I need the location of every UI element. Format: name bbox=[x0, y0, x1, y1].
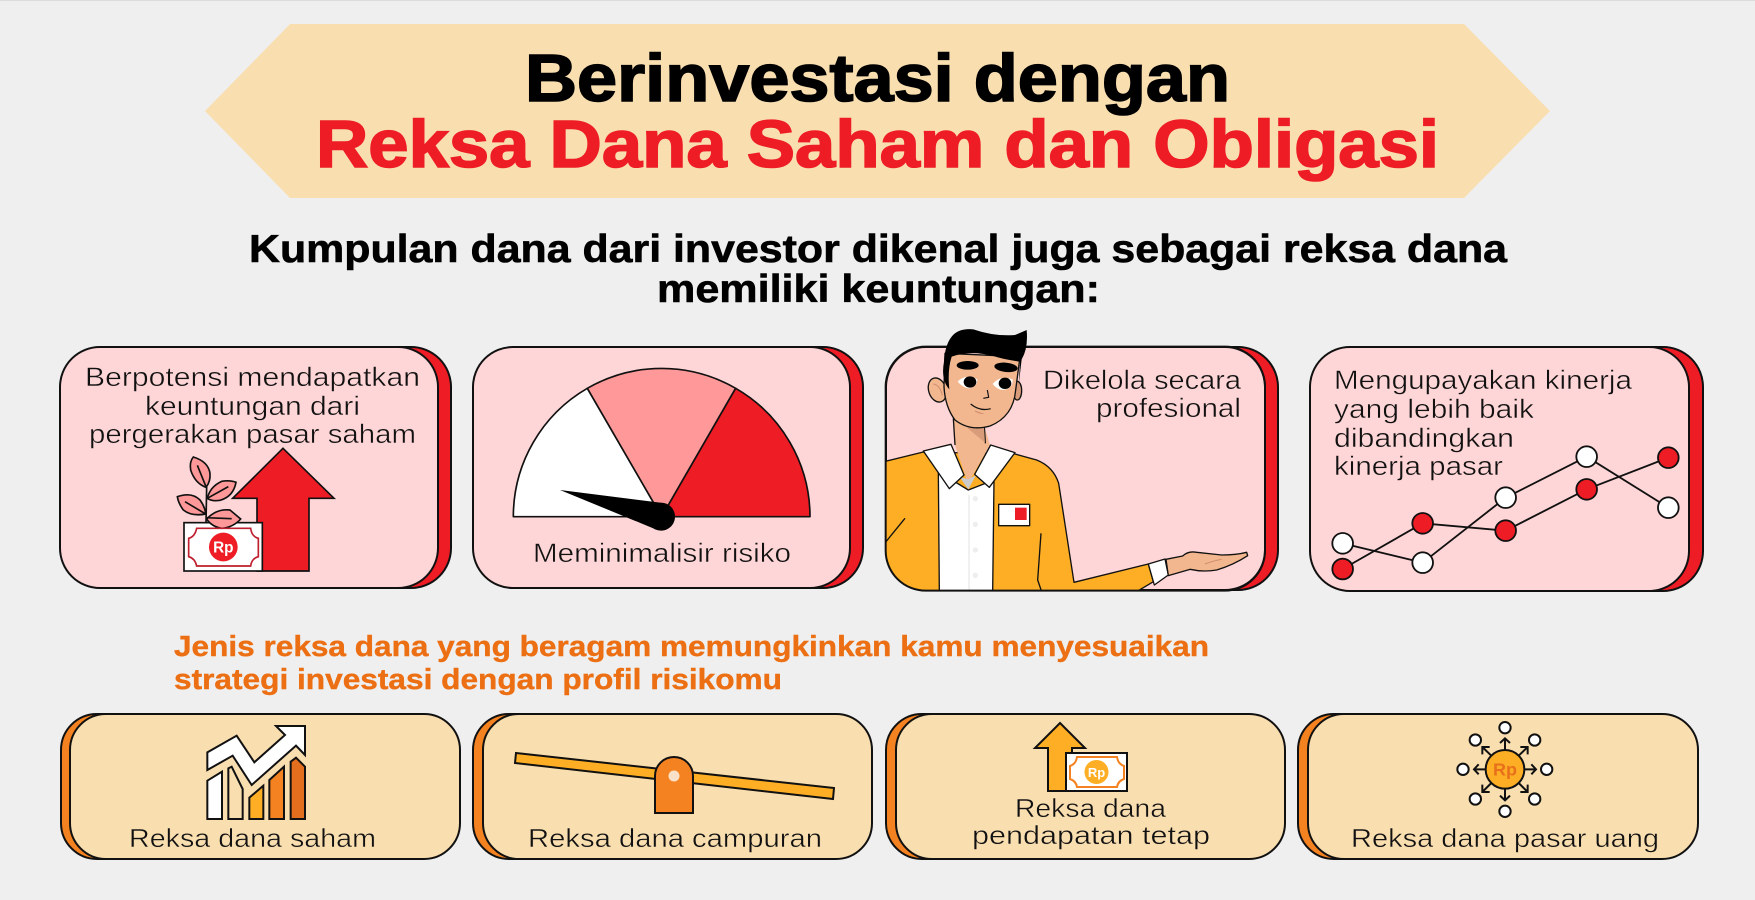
title banner bbox=[205, 24, 1550, 198]
panel text: Dikelola secara bbox=[1043, 365, 1242, 395]
panel: dikelola profesional bbox=[880, 329, 1278, 592]
icon: rising chart bbox=[207, 726, 305, 819]
panel text: yang lebih baik bbox=[1334, 394, 1535, 424]
subtitle bbox=[249, 228, 1507, 311]
icon: arrow up with plant and banknote: Rp bbox=[213, 539, 234, 556]
panel text bbox=[85, 362, 420, 449]
panel text: Berpotensi mendapatkan bbox=[85, 362, 420, 392]
orange heading: Jenis reksa dana yang beragam memungkinkan kamu menyesuaikan bbox=[174, 631, 1209, 663]
icon: Rp with radiating arrows: Rp bbox=[1493, 760, 1517, 780]
panel text: Mengupayakan kinerja bbox=[1334, 365, 1633, 395]
subtitle: Kumpulan dana dari investor dikenal juga sebagai reksa dana bbox=[249, 228, 1507, 271]
panel text: Reksa dana saham bbox=[129, 823, 376, 853]
illustration: man presenting bbox=[880, 329, 1265, 592]
panel text: kinerja pasar bbox=[1334, 451, 1503, 481]
gauge needle bbox=[560, 490, 675, 531]
panel: reksa dana pendapatan tetap bbox=[886, 714, 1285, 859]
panel text: Reksa dana campuran bbox=[528, 823, 822, 853]
gauge chart bbox=[513, 368, 810, 531]
panel: reksa dana campuran bbox=[473, 714, 872, 859]
panel text bbox=[1334, 365, 1633, 481]
panel text: profesional bbox=[1096, 393, 1241, 423]
line chart bbox=[1332, 446, 1679, 579]
panel: potensi keuntungan bbox=[60, 347, 451, 588]
title line 2: Reksa Dana Saham dan Obligasi bbox=[316, 107, 1439, 182]
panel text: Reksa dana bbox=[1015, 793, 1167, 823]
orange heading: strategi investasi dengan profil risikomu bbox=[174, 664, 782, 696]
icon: seesaw bbox=[515, 753, 834, 813]
panel: meminimalisir risiko bbox=[473, 347, 863, 588]
icon: Rp with radiating arrows bbox=[1457, 722, 1552, 817]
subtitle: memiliki keuntungan: bbox=[657, 268, 1100, 311]
icon: arrow and banknote bbox=[1035, 723, 1127, 791]
panel text: Meminimalisir risiko bbox=[533, 538, 791, 568]
panel text: keuntungan dari bbox=[145, 391, 360, 421]
icon: arrow and banknote: Rp bbox=[1088, 765, 1105, 780]
panel text bbox=[972, 793, 1210, 850]
panel text bbox=[1043, 365, 1242, 423]
panel text: pendapatan tetap bbox=[972, 820, 1210, 850]
panel text: dibandingkan bbox=[1334, 423, 1514, 453]
orange heading bbox=[174, 631, 1209, 696]
panel text: Reksa dana pasar uang bbox=[1351, 823, 1659, 853]
panel: reksa dana pasar uang bbox=[1298, 714, 1698, 859]
panel text: pergerakan pasar saham bbox=[89, 419, 416, 449]
title line 1: Berinvestasi dengan bbox=[525, 41, 1230, 116]
panel: kinerja lebih baik bbox=[1310, 347, 1703, 591]
icon: arrow up with plant and banknote bbox=[177, 448, 334, 571]
panel: reksa dana saham bbox=[61, 714, 460, 859]
